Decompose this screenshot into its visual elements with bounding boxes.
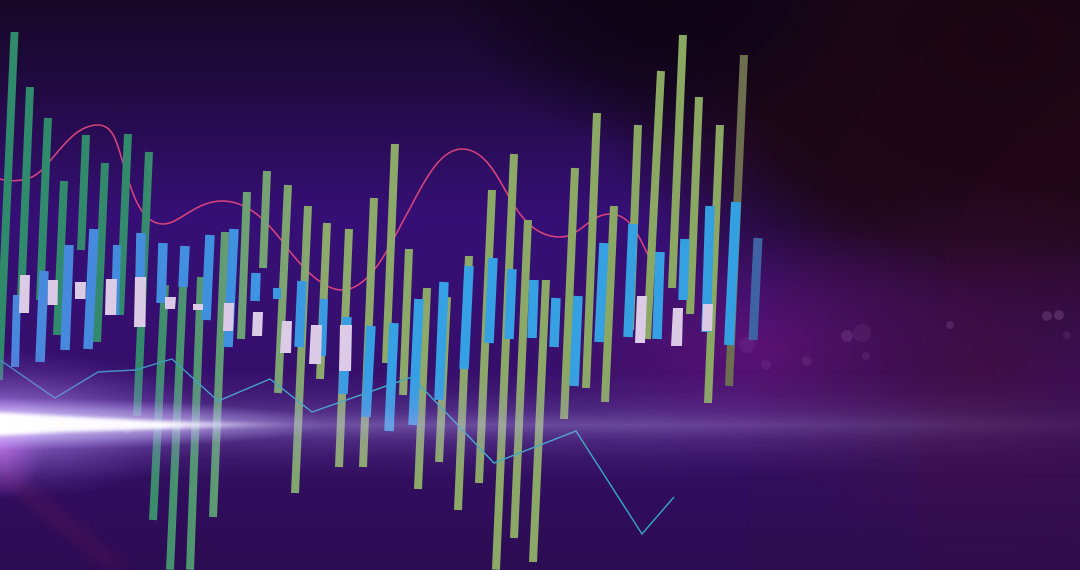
cyan angular line xyxy=(0,359,674,534)
pale lavender candle bodies xyxy=(19,275,713,371)
lens bokeh dots xyxy=(121,310,1071,434)
blue candlestick bars xyxy=(15,202,736,431)
faded blue bar at right end xyxy=(753,238,758,340)
horizontal light flare xyxy=(0,349,1080,500)
pink smooth trend line xyxy=(0,125,651,290)
faded olive bar at right end xyxy=(729,55,744,386)
green range bars xyxy=(0,32,720,570)
